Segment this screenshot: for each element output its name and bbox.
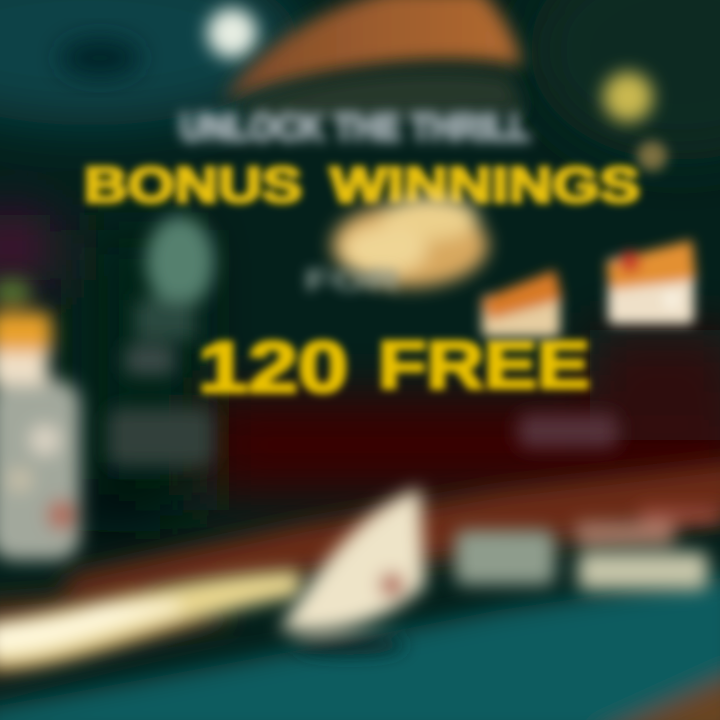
icon: yellow coin xyxy=(603,72,653,122)
gold swirl xyxy=(0,570,300,668)
small coin xyxy=(637,141,667,171)
heading: 120 free xyxy=(198,327,590,408)
gold coin pile xyxy=(332,196,488,287)
heading: 120 free: FREE xyxy=(378,327,590,403)
heading: bonus winnings: BONUS xyxy=(84,157,302,213)
small grey label: FOR xyxy=(304,264,400,297)
dome shadow band xyxy=(240,70,525,118)
heading: bonus winnings: WINNINGS xyxy=(330,157,640,213)
copper dome xyxy=(225,0,522,100)
heading: bonus winnings xyxy=(84,157,640,213)
heading: 120 free: 120 xyxy=(198,328,348,408)
playing card right xyxy=(606,240,696,324)
playing card centre xyxy=(480,270,562,337)
subtitle: UNLOCK THE THRILL xyxy=(180,107,530,149)
chip stack left xyxy=(0,279,80,560)
chips on table xyxy=(455,508,720,590)
faint grey label right xyxy=(518,414,618,448)
white cards on table xyxy=(280,488,425,655)
icon: white glow xyxy=(207,8,257,58)
bottle xyxy=(108,216,214,466)
